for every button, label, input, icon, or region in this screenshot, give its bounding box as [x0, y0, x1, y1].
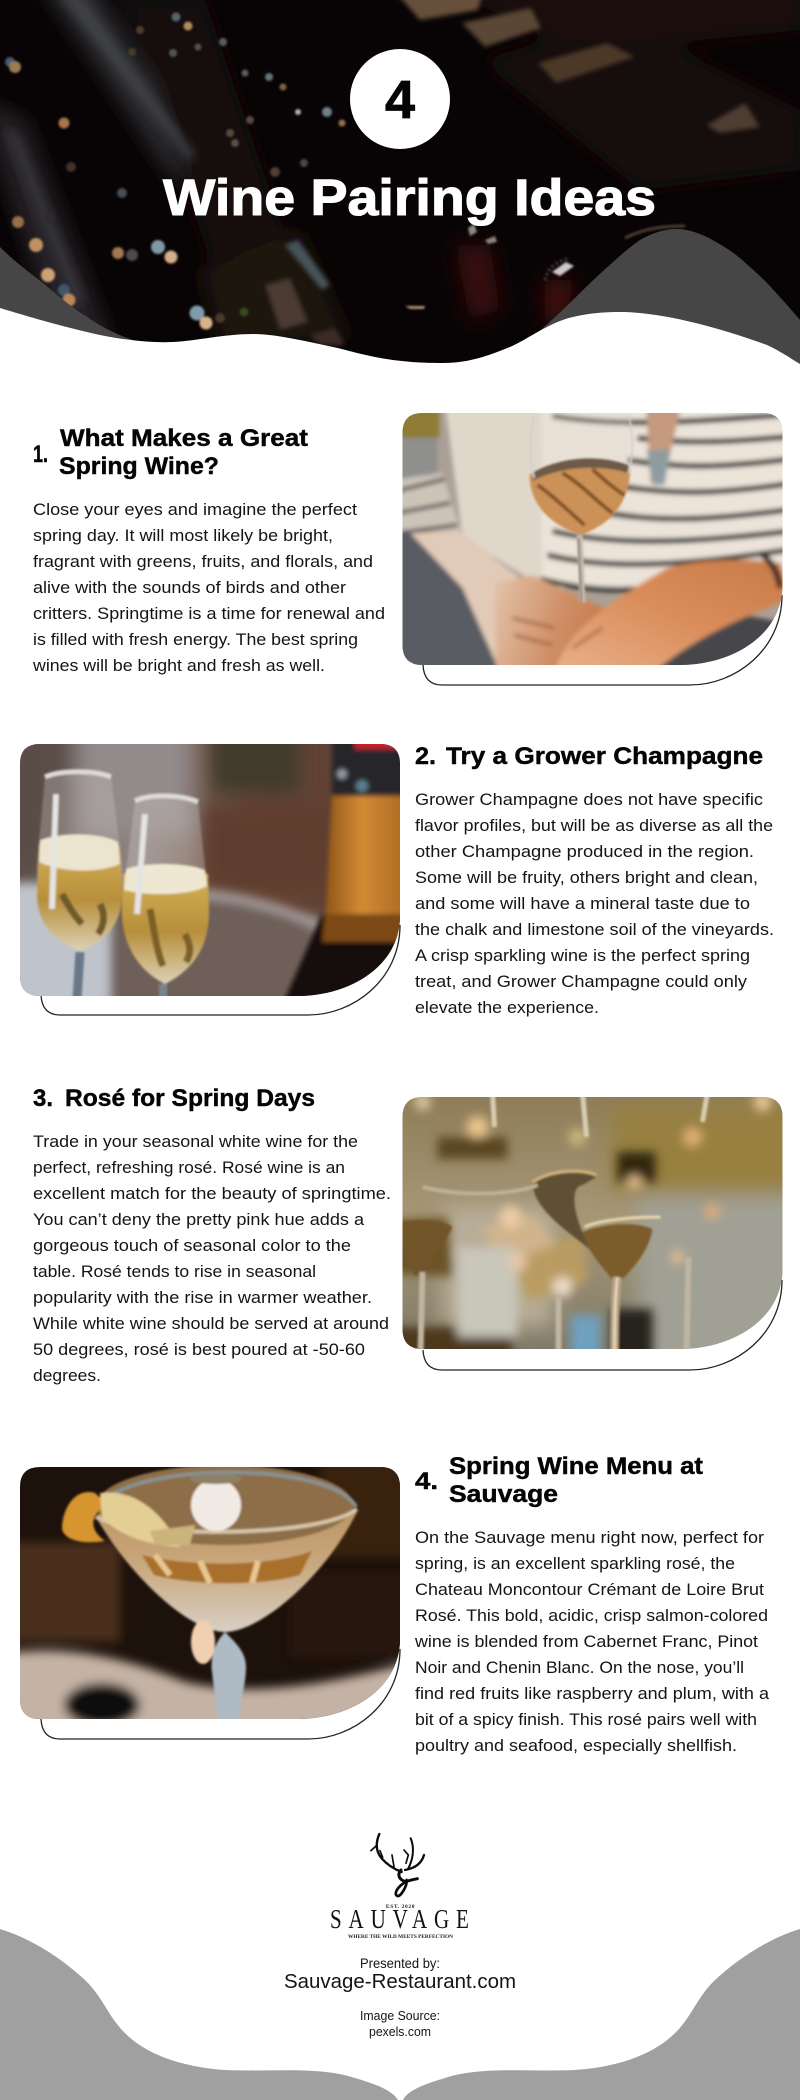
- text block: section 2 body: elevate the experience.: [415, 999, 599, 1017]
- text block: section 4 body: spring, is an excellent sparkling rosé, the: [415, 1555, 735, 1573]
- text block: section 1 body: is filled with fresh energy. The best spring: [33, 631, 358, 649]
- heading: section 2: Try a Grower Champagne: [446, 743, 763, 770]
- text block: section 1 body: alive with the sounds of birds and other: [33, 579, 347, 597]
- text block: section 3 body: gorgeous touch of seasonal color to the: [33, 1237, 351, 1255]
- text block: section 3 body: [33, 1133, 391, 1385]
- text block: section 3 body: Trade in your seasonal white wine for the: [33, 1133, 358, 1151]
- logo: wordmark: SAUVAGE: [330, 1905, 469, 1935]
- panel: section 3: [33, 1085, 800, 1387]
- website: Sauvage-Restaurant.com: [284, 1970, 516, 1993]
- text block: section 2 body: flavor profiles, but will be as diverse as all the: [415, 817, 773, 835]
- panel: section 4: [0, 1437, 770, 1757]
- text block: section 4 body: [414, 1529, 770, 1755]
- number badge: [350, 49, 450, 149]
- text block: section 4 body: Chateau Moncontour Crémant de Loire Brut: [415, 1581, 764, 1599]
- heading: section 3: Rosé for Spring Days: [65, 1085, 315, 1112]
- logo: tagline: WHERE THE WILD MEETS PERFECTION: [348, 1934, 453, 1940]
- text block: section 4 body: On the Sauvage menu right now, perfect for: [415, 1529, 765, 1547]
- text block: section 2 body: Some will be fruity, others bright and clean,: [415, 869, 758, 887]
- photo: woman holding rosé glass: [402, 413, 782, 665]
- heading: section 4: [415, 1453, 703, 1508]
- heading: section 4: Sauvage: [449, 1481, 558, 1508]
- text block: section 2 body: the chalk and limestone soil of the vineyards.: [415, 921, 774, 939]
- dark gray wave left: [0, 247, 150, 350]
- text block: section 4 body: find red fruits like raspberry and plum, with a: [415, 1685, 770, 1703]
- panel: section 1: [33, 413, 783, 686]
- text block: section 4 body: Noir and Chenin Blanc. On the nose, you’ll: [415, 1659, 744, 1677]
- text block: section 4 body: bit of a spicy finish. This rosé pairs well with: [415, 1711, 757, 1729]
- text block: section 3 body: 50 degrees, rosé is best poured at -50-60: [33, 1341, 365, 1359]
- text block: section 1 body: Close your eyes and imagine the perfect: [33, 501, 357, 519]
- outline under photo 4: [41, 1649, 400, 1739]
- text block: section 2 body: and some will have a mineral taste due to: [415, 895, 750, 913]
- text block: section 1 body: wines will be bright and fresh as well.: [32, 657, 325, 675]
- heading: section 4: Spring Wine Menu at: [449, 1453, 703, 1480]
- heading: section 3: 3.: [33, 1085, 53, 1112]
- photo: row of wine glasses: [402, 1097, 782, 1349]
- presented by label: Presented by:: [360, 1955, 440, 1971]
- outline under photo 1: [423, 595, 782, 685]
- text block: section 2 body: treat, and Grower Champagne could only: [415, 973, 748, 991]
- icon: antlers: [371, 1834, 424, 1896]
- text block: section 3 body: popularity with the rise in warmer weather.: [33, 1289, 372, 1307]
- heading: section 1: Spring Wine?: [59, 453, 219, 480]
- text block: section 1 body: critters. Springtime is a time for renewal and: [33, 605, 385, 623]
- heading: section 2: 2.: [415, 743, 436, 770]
- footer gray wave left: [0, 1929, 398, 2100]
- logo: est. date: EST. 2020: [386, 1904, 415, 1910]
- text block: section 2 body: other Champagne produced in the region.: [415, 843, 754, 861]
- footer gray wave right: [403, 1929, 800, 2100]
- text block: section 3 body: degrees.: [33, 1367, 101, 1385]
- text block: section 3 body: You can’t deny the pretty pink hue adds a: [33, 1211, 365, 1229]
- outline under photo 3: [423, 1280, 782, 1370]
- photo: martini glass with citrus twist: [20, 1467, 400, 1719]
- heading: section 1: 1.: [33, 441, 48, 468]
- text block: section 3 body: While white wine should be served at around: [33, 1315, 389, 1333]
- panel: section 2: [20, 744, 772, 1016]
- text block: section 4 body: wine is blended from Cabernet Franc, Pinot: [414, 1633, 758, 1651]
- text block: section 3 body: perfect, refreshing rosé. Rosé wine is an: [33, 1159, 345, 1177]
- image source value: pexels.com: [369, 2024, 431, 2039]
- title: Wine Pairing Ideas: [163, 169, 656, 226]
- heading: section 1: [33, 425, 308, 480]
- text block: section 2 body: A crisp sparkling wine is the perfect spring: [415, 947, 750, 965]
- text block: section 1 body: [32, 501, 385, 675]
- text block: section 1 body: fragrant with greens, fruits, and florals, and: [33, 553, 373, 571]
- image source label: Image Source:: [360, 2008, 440, 2023]
- heading: section 1: What Makes a Great: [60, 425, 308, 452]
- text block: section 2 body: Grower Champagne does not have specific: [415, 791, 763, 809]
- heading: section 4: 4.: [415, 1468, 438, 1495]
- number badge: 4: [385, 70, 415, 130]
- white wave bottom of header: [0, 308, 800, 400]
- header photo: wine cellar bottles: [0, 0, 800, 380]
- dark gray wave right: [535, 229, 800, 380]
- text block: section 1 body: spring day. It will most likely be bright,: [33, 527, 333, 545]
- text block: section 4 body: poultry and seafood, especially shellfish.: [415, 1737, 737, 1755]
- photo: two champagne flutes and bottle: [20, 744, 400, 996]
- text block: section 3 body: excellent match for the beauty of springtime.: [33, 1185, 391, 1203]
- footer credits: [284, 1955, 516, 2039]
- logo: Sauvage stag antlers: [330, 1834, 469, 1940]
- text block: section 4 body: Rosé. This bold, acidic, crisp salmon-colored: [415, 1607, 768, 1625]
- text block: section 2 body: [415, 791, 774, 1017]
- text block: section 3 body: table. Rosé tends to rise in seasonal: [33, 1263, 316, 1281]
- outline under photo 2: [41, 925, 400, 1015]
